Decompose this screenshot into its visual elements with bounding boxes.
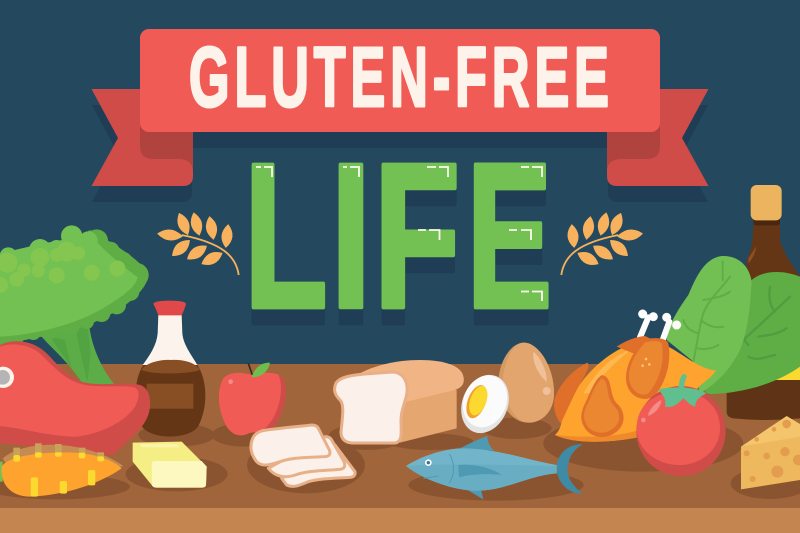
apple [219,363,286,435]
title: life: F [374,120,460,351]
right food group [387,185,800,501]
broccoli [0,225,149,385]
banner shadow [92,105,708,202]
whole egg [498,343,554,423]
butter [133,442,207,488]
boiled egg half [453,368,517,440]
left food group [0,225,405,499]
bread front slice [335,372,407,443]
chicken drumstick back [617,336,669,399]
letter highlights [256,167,542,301]
back leaf [705,272,800,394]
ribbon main panel [140,29,660,132]
title: life: E [467,121,552,351]
ribbon left fold [140,120,193,172]
sweet potato [0,443,123,497]
soy sauce bottle [136,301,205,436]
chicken wing [554,363,589,423]
shadows left [0,423,405,499]
steak [0,341,150,455]
title: life [244,120,552,352]
title: life: I [330,121,372,352]
broccoli stalk [40,317,115,385]
chicken drumstick front [581,375,624,437]
ribbon right tail [607,89,708,186]
cheese [741,416,800,489]
chicken body [555,340,716,442]
broccoli crown [0,225,138,337]
broccoli florets [0,242,125,293]
shadows right [387,415,800,501]
title: life: L [244,121,328,352]
chicken bones [638,310,681,340]
ribbon right fold [607,120,660,172]
banner [92,29,708,202]
table [0,364,800,533]
broccoli dark crown [0,229,149,347]
bread slices [251,425,355,486]
wheat right [561,211,644,275]
tomato [636,377,726,476]
lettuce [667,256,800,394]
oil bottle [727,185,800,420]
bread loaf top [355,360,464,402]
bread loaf side [400,387,457,443]
title: gluten-free: GLUTEN-FREE [189,30,614,124]
ribbon left tail [92,89,193,186]
chicken highlight [583,348,633,393]
chicken [554,310,716,442]
wheat left [156,211,239,275]
front leaf [667,256,752,393]
fish [406,436,583,499]
